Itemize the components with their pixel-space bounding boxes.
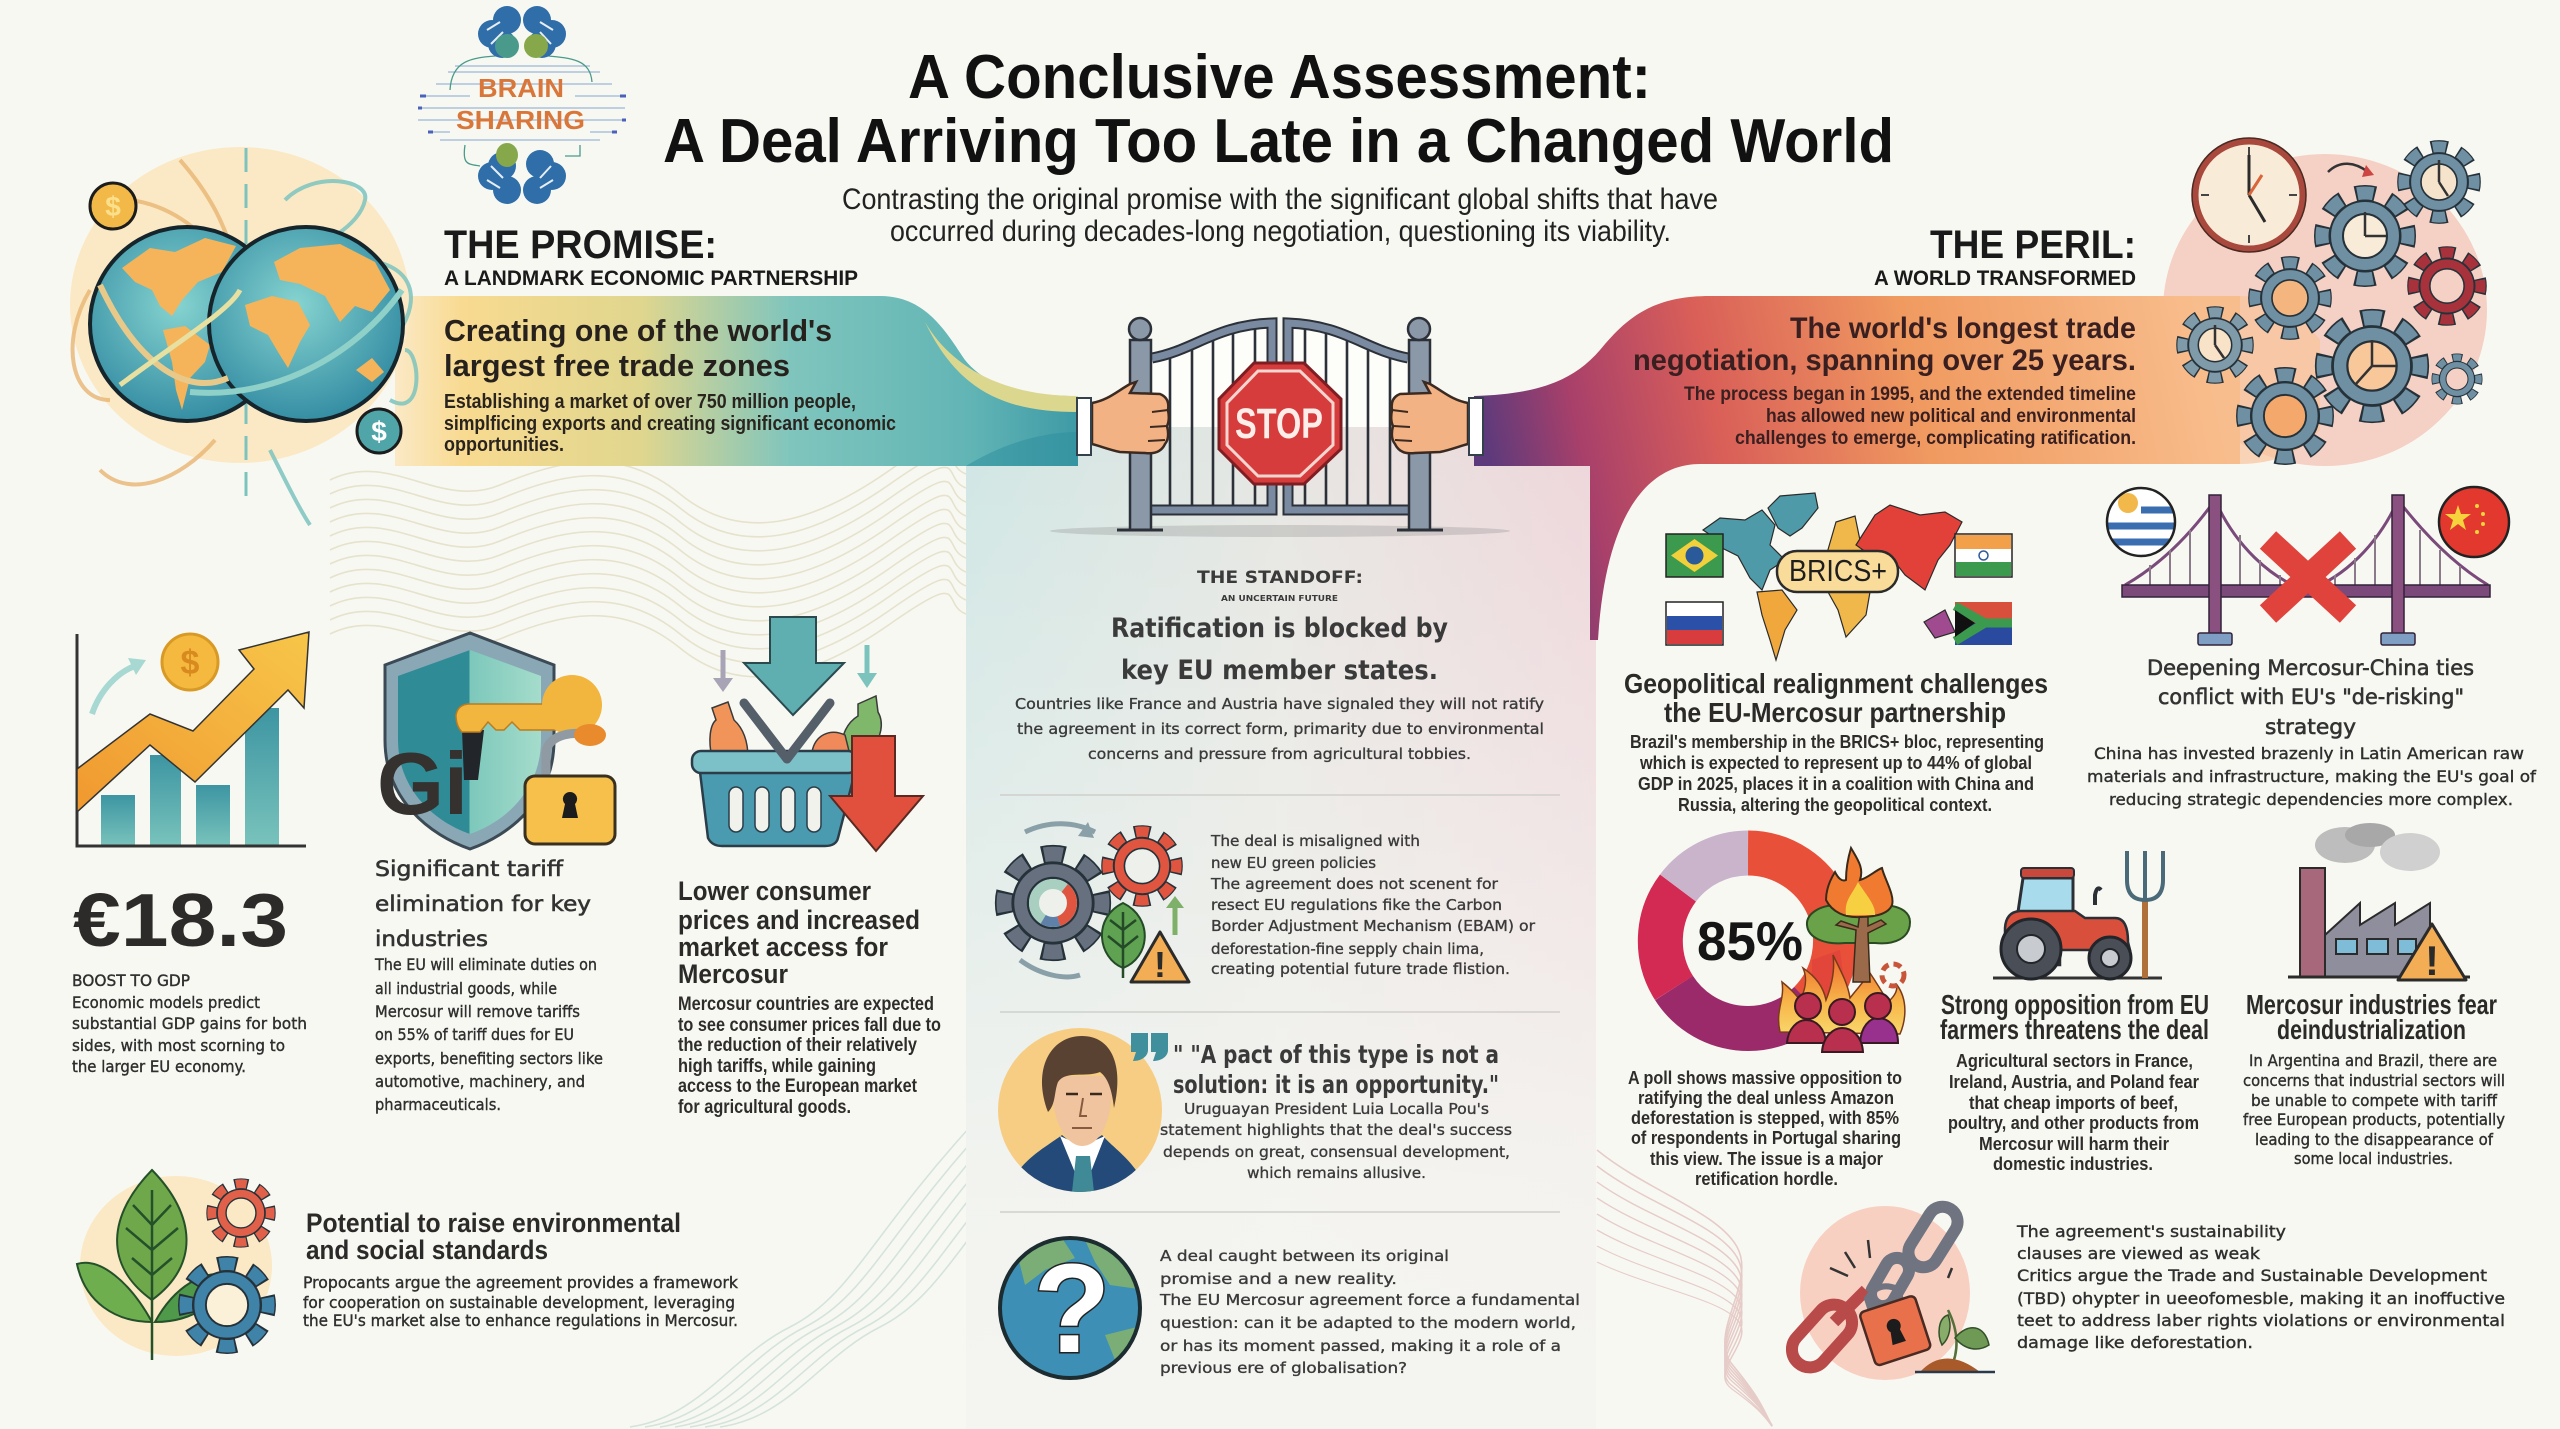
text block: the standoff: Ratification is blocked by <box>1111 613 1448 644</box>
text block: green policies <box>1210 832 1536 978</box>
text block: deindustrialization: be unable to compete with tariff <box>2251 1091 2498 1110</box>
text block: weak sustainability clauses: (TBD) ohypter in ueeofomesble, making it an inoffuctive <box>2017 1289 2505 1308</box>
text block: tariff elimination: all industrial goods, while <box>375 979 557 998</box>
text block: caught between: question: can it be adapted to the modern world, <box>1160 1314 1576 1332</box>
text block: poll opposition: ratifying the deal unless Amazon <box>1638 1087 1894 1108</box>
icon: gold coin <box>90 183 136 229</box>
text block: Mercosur-China ties: Deepening Mercosur-China ties <box>2147 656 2474 680</box>
chart: 85% donut: 85% <box>1697 910 1803 972</box>
text block: farmers opposition: that cheap imports of beef, <box>1969 1092 2178 1113</box>
basket <box>692 751 857 846</box>
red chain links <box>1785 1290 1866 1375</box>
text block: green policies: creating potential future trade flistion. <box>1211 960 1510 978</box>
cuffs <box>1077 398 1483 455</box>
text block: geopolitical realignment: Russia, altering the geopolitical context. <box>1678 794 1992 815</box>
icon: warning triangle <box>1131 932 1189 985</box>
text block: environmental standards <box>303 1208 739 1330</box>
icon: green policy gears <box>1004 822 1189 985</box>
text block: green policies: Border Adjustment Mechanism (EBAM) or <box>1211 917 1536 935</box>
heading: the peril <box>1874 223 2136 290</box>
flag: Uruguay <box>2105 486 2180 556</box>
flag: China <box>2439 487 2509 557</box>
text block: weak sustainability clauses: clauses are viewed as weak <box>2017 1244 2261 1263</box>
icon: leaf and gears <box>77 1170 272 1360</box>
text block: poll opposition: this view. The issue is a major <box>1650 1148 1883 1169</box>
text block: tariff elimination: pharmaceuticals. <box>375 1095 501 1114</box>
gate fill above panel <box>1152 325 1408 427</box>
text block: Mercosur-China ties: reducing strategic dependencies more complex. <box>2109 790 2513 809</box>
icon: warning triangle <box>2398 924 2466 984</box>
title <box>663 43 1894 176</box>
chart: 85% donut <box>1660 848 1910 1052</box>
icon: gate with stop sign and hands <box>1050 318 1510 537</box>
heading: the peril: A WORLD TRANSFORMED <box>1874 267 2136 290</box>
text block: farmers opposition <box>1940 989 2209 1174</box>
BRICS+ pill: BRICS+ <box>1789 553 1887 588</box>
padlock <box>1853 1278 1931 1366</box>
grey chain links <box>1867 1201 1963 1311</box>
text block: environmental standards: the EU's market alse to enhance regulations in Mercosur. <box>303 1311 738 1330</box>
stat: GDP boost: the larger EU economy. <box>72 1057 246 1076</box>
text block: longest negotiation: challenges to emerge, complicating ratification. <box>1735 428 2136 449</box>
quote: solution: it is an opportunity." <box>1173 1070 1499 1099</box>
text block: Mercosur-China ties: China has invested brazenly in Latin American raw <box>2094 744 2524 763</box>
icon: burning tree <box>1807 848 1910 982</box>
text block: lower consumer prices: to see consumer prices fall due to <box>678 1015 941 1036</box>
coin <box>162 634 218 690</box>
text block: caught between: previous ere of globalisation? <box>1160 1359 1407 1377</box>
zigzag arrow <box>77 632 309 812</box>
icon: teal coin: $ <box>371 416 387 447</box>
text block: free trade zones: Creating one of the world's <box>444 313 832 348</box>
chart bars <box>101 708 279 846</box>
circuit lines <box>418 55 626 166</box>
text block: green policies: The deal is misaligned with <box>1210 832 1420 850</box>
text block: poll opposition: deforestation is stepped, with 85% <box>1631 1107 1899 1128</box>
icon: broken chain with padlock <box>1785 1201 1995 1380</box>
icon: wall clock <box>2192 138 2306 252</box>
panel: the standoff background <box>966 427 1596 1429</box>
quote: Uruguayan President Luia Localla Pou's <box>1184 1100 1489 1118</box>
sprout <box>1915 1310 1995 1372</box>
text block: poll opposition: A poll shows massive opposition to <box>1628 1067 1902 1088</box>
text block: farmers opposition: Strong opposition from EU <box>1941 989 2209 1020</box>
hand: left <box>1092 382 1169 453</box>
text block: geopolitical realignment: Brazil's membership in the BRICS+ bloc, representing <box>1630 731 2044 752</box>
text block: green policies: The agreement does not scenent for <box>1210 875 1499 893</box>
subtitle: occurred during decades-long negotiation, questioning its viability. <box>890 215 1671 248</box>
icon: protesters <box>1787 993 1898 1052</box>
text block: lower consumer prices: Mercosur countries are expected <box>678 994 934 1015</box>
quote: statement highlights that the deal's success <box>1160 1121 1512 1139</box>
hand: right <box>1391 382 1468 453</box>
text block: environmental standards: Potential to raise environmental <box>306 1208 681 1238</box>
text block: longest negotiation <box>1633 312 2136 449</box>
stop sign: STOP <box>1235 400 1323 448</box>
quote: depends on great, consensual development, <box>1163 1143 1510 1161</box>
text block: farmers opposition: farmers threatens the deal <box>1940 1014 2209 1045</box>
text block: free trade zones: largest free trade zones <box>444 348 790 383</box>
icon: bottom brain <box>478 143 566 204</box>
text block: free trade zones: Establishing a market of over 750 million people, <box>444 391 856 413</box>
text block: lower consumer prices: prices and increased <box>678 905 920 935</box>
text block: free trade zones: opportunities. <box>444 434 564 456</box>
text block: weak sustainability clauses: The agreement's sustainability <box>2016 1222 2286 1241</box>
red cross <box>2268 540 2348 614</box>
text block: environmental standards: and social standards <box>306 1235 548 1265</box>
icon: warning triangle: ! <box>1154 944 1166 985</box>
logo: brain sharing <box>418 6 626 204</box>
text block: lower consumer prices: Lower consumer <box>678 876 871 906</box>
text block: deindustrialization: some local industries. <box>2294 1149 2453 1168</box>
icon: globe with question mark: ? <box>1034 1238 1110 1379</box>
text block: environmental standards: for cooperation on sustainable development, leveraging <box>303 1293 735 1312</box>
text block: geopolitical realignment: GDP in 2025, places it in a coalition with China and <box>1638 773 2034 794</box>
subtitle <box>842 183 1718 248</box>
stat: GDP boost: €18.3 <box>73 878 288 962</box>
text block: green policies: new EU green policies <box>1211 854 1376 872</box>
icon: portrait of president <box>998 1028 1162 1195</box>
text block: weak sustainability clauses: damage like deforestation. <box>2017 1333 2253 1352</box>
icon: fire <box>1779 955 1905 1034</box>
text block: geopolitical realignment: Geopolitical realignment challenges <box>1624 668 2048 699</box>
text block: geopolitical realignment <box>1624 668 2048 815</box>
text block: Mercosur-China ties: strategy <box>2265 715 2356 739</box>
icon: factory with warning <box>2288 823 2470 984</box>
text block: deindustrialization: deindustrialization <box>2277 1014 2466 1045</box>
text block: poll opposition: of respondents in Portugal sharing <box>1631 1127 1901 1148</box>
heading: the promise: THE PROMISE: <box>444 223 717 267</box>
flag: Brazil <box>1666 534 1723 577</box>
text block: deindustrialization: free European products, potentially <box>2243 1110 2505 1129</box>
stop sign <box>1219 363 1341 484</box>
text block: farmers opposition: domestic industries. <box>1993 1153 2153 1174</box>
text block: farmers opposition: Mercosur will harm their <box>1979 1133 2169 1154</box>
text block: poll opposition <box>1628 1067 1902 1189</box>
title: A Deal Arriving Too Late in a Changed World <box>663 107 1894 176</box>
padlock <box>525 724 615 844</box>
icon: shopping basket with arrows <box>692 617 923 851</box>
icon: shield key and padlock <box>377 633 615 849</box>
text block: caught between <box>1159 1247 1580 1377</box>
icon: gold coin: $ <box>105 191 121 222</box>
text block: green policies: deforestation-fine sepply chain lima, <box>1211 940 1484 958</box>
small arrows <box>720 650 726 680</box>
flag: Russia <box>1666 602 1723 645</box>
icon: teal coin <box>357 409 401 453</box>
text block: weak sustainability clauses <box>2016 1222 2505 1352</box>
icon: clocks and gears <box>2182 138 2481 457</box>
text block: tariff elimination: elimination for key <box>375 892 591 916</box>
text block: poll opposition: retification hordle. <box>1695 1168 1838 1189</box>
text block: deindustrialization: In Argentina and Brazil, there are <box>2249 1051 2497 1070</box>
text block: free trade zones: simplficing exports and creating significant economic <box>444 413 896 435</box>
icon: warning triangle: ! <box>2425 937 2439 984</box>
text block: lower consumer prices: the reduction of their relatively <box>678 1035 917 1056</box>
text block: lower consumer prices: access to the European market <box>678 1076 918 1097</box>
text block: the standoff <box>1015 568 1544 763</box>
logo text <box>456 73 585 135</box>
text block: the standoff: AN UNCERTAIN FUTURE <box>1221 594 1338 603</box>
big teal arrow <box>744 617 844 715</box>
logo text: BRAIN <box>478 73 564 103</box>
text block: lower consumer prices <box>678 876 941 1118</box>
text block: longest negotiation: has allowed new political and environmental <box>1766 406 2136 427</box>
heading: the promise: A LANDMARK ECONOMIC PARTNERSHIP <box>444 267 858 290</box>
text block: farmers opposition: Agricultural sectors in France, <box>1956 1050 2193 1071</box>
text block: environmental standards: Propocants argue the agreement provides a framework <box>303 1273 739 1292</box>
continents <box>1703 493 1962 660</box>
heading: the peril: THE PERIL: <box>1930 223 2136 267</box>
coin: $ <box>181 644 200 682</box>
text block: lower consumer prices: market access for <box>678 932 888 962</box>
quote: " "A pact of this type is not a <box>1173 1040 1499 1069</box>
stat: GDP boost: substantial GDP gains for both <box>72 1014 307 1033</box>
text block: tariff elimination: industries <box>375 927 488 951</box>
text block: weak sustainability clauses: teet to address laber rights violations or environmental <box>2017 1311 2505 1330</box>
banner: the promise <box>395 296 1078 466</box>
text block: the standoff: Countries like France and Austria have signaled they will not ratify <box>1015 695 1544 713</box>
key <box>456 675 602 780</box>
text block: Mercosur-China ties: materials and infrastructure, making the EU's goal of <box>2087 767 2536 786</box>
text block: geopolitical realignment: the EU-Mercosur partnership <box>1664 697 2006 728</box>
icon: quote marks <box>1131 1033 1168 1061</box>
icon: tractor and pitchfork <box>1993 851 2163 979</box>
text block: tariff elimination: Mercosur will remove tariffs <box>375 1002 580 1021</box>
text block: tariff elimination: on 55% of tariff dues for EU <box>375 1025 574 1044</box>
icon: left globe <box>88 225 246 423</box>
flag: India <box>1955 534 2012 577</box>
text block: tariff elimination: Significant tariff <box>375 857 564 881</box>
text block: Mercosur-China ties <box>2087 656 2536 809</box>
text block: lower consumer prices: high tariffs, while gaining <box>678 1056 876 1077</box>
text block: the standoff: the agreement in its correct form, primarity due to environmental <box>1017 720 1544 738</box>
title: A Conclusive Assessment: <box>908 43 1651 112</box>
text block: deindustrialization <box>2243 989 2505 1168</box>
icon: BRICS+ world map and flags <box>1666 493 2012 660</box>
quote <box>1160 1040 1512 1182</box>
text block: green policies: resect EU regulations fike the Carbon <box>1211 896 1502 914</box>
glitch letters: Gi <box>377 734 468 833</box>
stat: GDP boost <box>72 878 307 1076</box>
icon: interlinked globes <box>70 147 416 525</box>
icon: right globe <box>209 227 403 421</box>
text block: tariff elimination: exports, benefiting sectors like <box>375 1049 603 1068</box>
red arrow <box>830 736 923 851</box>
text block: caught between: promise and a new reality. <box>1160 1270 1397 1288</box>
gate bars <box>1170 327 1390 505</box>
text block: deindustrialization: leading to the disappearance of <box>2255 1130 2493 1149</box>
text block: weak sustainability clauses: Critics argue the Trade and Sustainable Development <box>2017 1266 2487 1285</box>
text block: tariff elimination <box>374 857 603 1114</box>
gate frame <box>1152 323 1408 510</box>
subtitle: Contrasting the original promise with the significant global shifts that have <box>842 183 1718 216</box>
stat: GDP boost: Economic models predict <box>72 993 260 1012</box>
bottles <box>710 696 881 758</box>
logo text: SHARING <box>456 105 585 135</box>
banner: the peril <box>1474 154 2487 640</box>
icon: broken bridge <box>2105 486 2509 645</box>
text block: geopolitical realignment: which is expected to represent up to 44% of global <box>1639 752 2032 773</box>
text block: lower consumer prices: for agricultural goods. <box>678 1097 851 1118</box>
heading: the promise <box>444 223 858 290</box>
text block: deindustrialization: concerns that industrial sectors will <box>2243 1071 2505 1090</box>
stat: GDP boost: sides, with most scorning to <box>72 1036 285 1055</box>
text block: tariff elimination: automotive, machinery, and <box>375 1072 585 1091</box>
text block: caught between: The EU Mercosur agreement force a fundamental <box>1159 1291 1580 1309</box>
icon: top brain <box>478 6 566 58</box>
smoke clouds <box>2315 823 2440 871</box>
text block: farmers opposition: poultry, and other products from <box>1948 1112 2199 1133</box>
flag: South Africa <box>1955 602 2012 645</box>
text block: Mercosur-China ties: conflict with EU's "de-risking" <box>2158 685 2464 709</box>
text block: caught between: or has its moment passed, making it a role of a <box>1160 1337 1561 1355</box>
text block: the standoff: concerns and pressure from agricultural tobbies. <box>1088 745 1471 763</box>
text block: caught between: A deal caught between its original <box>1160 1247 1449 1265</box>
text block: longest negotiation: The process began in 1995, and the extended timeline <box>1684 384 2136 405</box>
icon: globe with question mark <box>1000 1235 1145 1379</box>
gate posts <box>1129 318 1430 530</box>
text block: longest negotiation: The world's longest trade <box>1790 312 2136 345</box>
quote: which remains allusive. <box>1247 1164 1426 1182</box>
text block: the standoff: THE STANDOFF: <box>1197 568 1363 588</box>
stat: GDP boost: BOOST TO GDP <box>72 971 190 990</box>
text block: farmers opposition: Ireland, Austria, and Poland fear <box>1949 1071 2199 1092</box>
text block: the standoff: key EU member states. <box>1121 655 1438 686</box>
text block: tariff elimination: The EU will eliminate duties on <box>374 955 597 974</box>
text block: free trade zones <box>444 313 896 456</box>
bar chart: rising GDP <box>77 632 309 846</box>
text block: lower consumer prices: Mercosur <box>678 959 788 989</box>
text block: longest negotiation: negotiation, spanning over 25 years. <box>1633 344 2136 377</box>
